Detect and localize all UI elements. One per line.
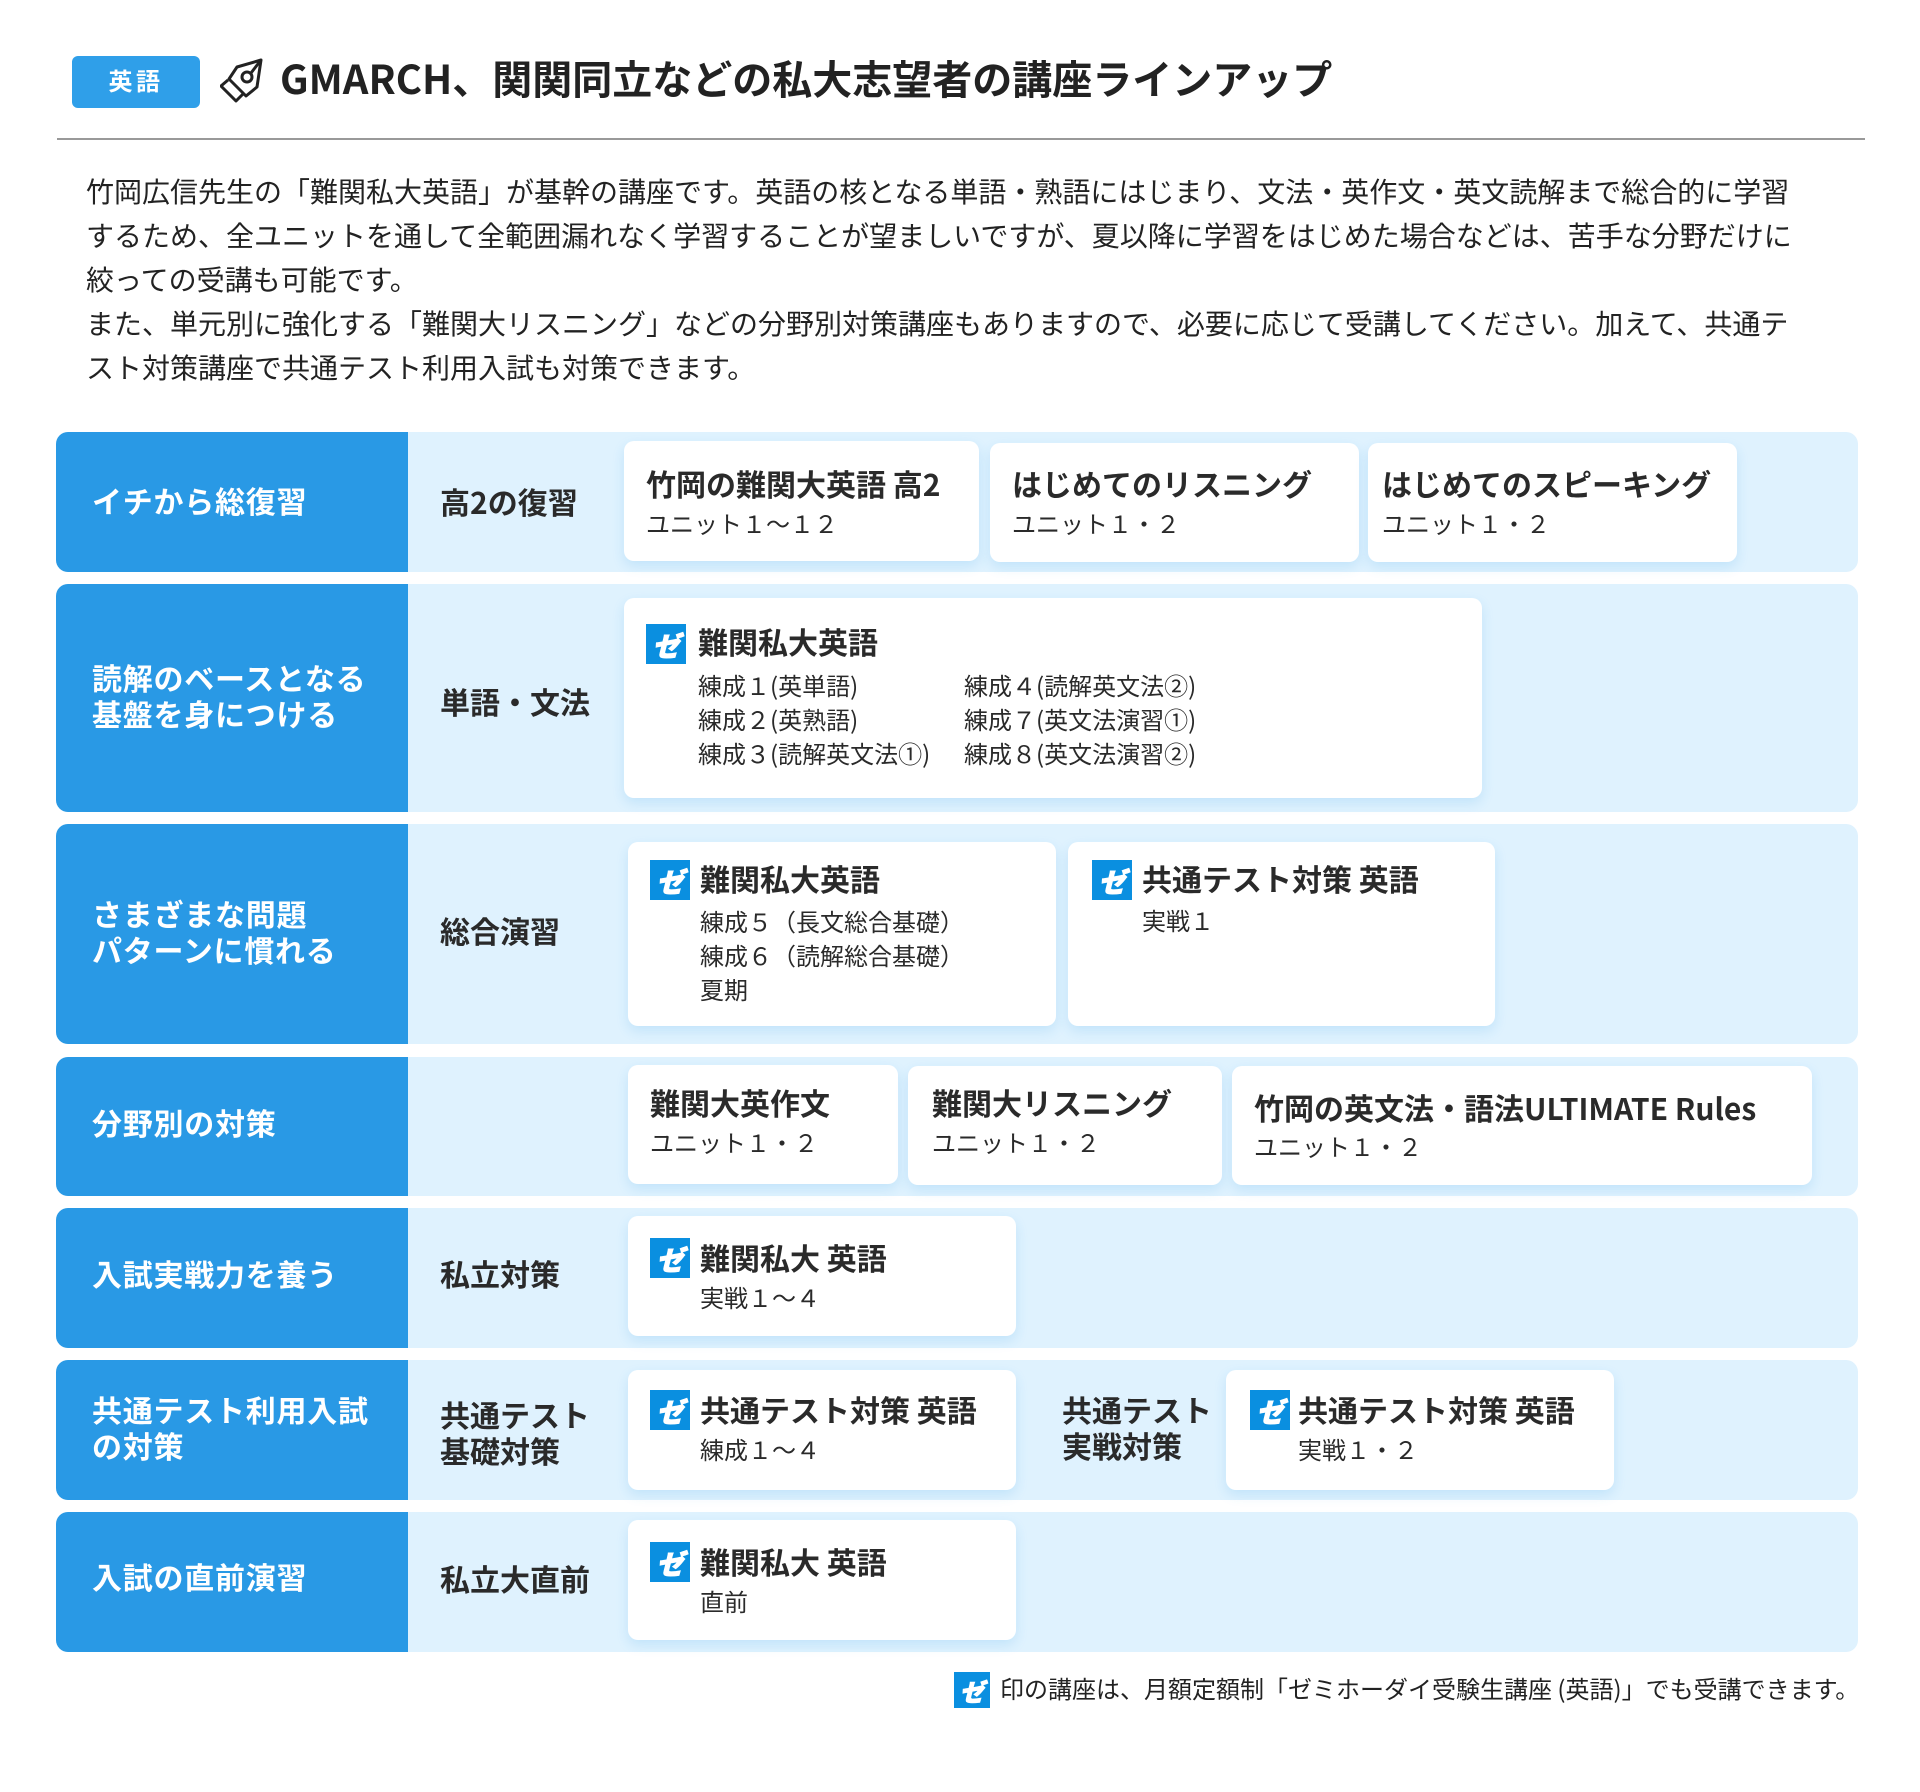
row 3 panel [56, 824, 1858, 1044]
card units: 実戦１ [1142, 902, 1214, 937]
row 2 heading [56, 584, 408, 812]
unit list right: 練成８(英文法演習②) [964, 735, 1196, 770]
card title: はじめてのスピーキング [1382, 461, 1711, 505]
row 5 heading [56, 1208, 408, 1348]
intro paragraph: また、単元別に強化する「難関大リスニング」などの分野別対策講座もありますので、必要に応じて受講してください。加えて、共通テ [86, 303, 1788, 343]
card: はじめてのリスニング [990, 443, 1359, 562]
row 5 panel [56, 1208, 1858, 1348]
card title: 難関大リスニング [932, 1080, 1172, 1124]
row 2 label: 基盤を身につける [92, 691, 338, 735]
card: 難関大リスニング [908, 1066, 1222, 1185]
intro paragraph: 絞っての受講も可能です。 [86, 259, 418, 299]
intro paragraph: 竹岡広信先生の「難関私大英語」が基幹の講座です。英語の核となる単語・熟語にはじまり、文法・英作文・英文読解まで総合的に学習 [86, 171, 1789, 211]
row 2 label [92, 655, 366, 735]
row 5 sub label: 私立対策 [440, 1251, 560, 1295]
row 6 heading [56, 1360, 408, 1500]
card title: はじめてのリスニング [1012, 461, 1312, 505]
row 7 panel [56, 1512, 1858, 1652]
row 2 panel [56, 584, 1858, 812]
unit list left: 練成２(英熟語) [698, 701, 858, 736]
unit list right: 練成７(英文法演習①) [964, 701, 1196, 736]
intro paragraph [86, 171, 1792, 387]
unit list right [964, 667, 1196, 770]
unit list: 夏期 [700, 971, 748, 1006]
card units: ユニット１・２ [932, 1124, 1100, 1159]
card title: 難関私大 英語 [700, 1539, 887, 1583]
row 6 second sub label: 共通テスト [1062, 1387, 1212, 1431]
row 2 sub label: 単語・文法 [440, 679, 590, 723]
row 6 panel [56, 1360, 1858, 1500]
unit list [700, 903, 964, 1006]
card title: 難関私大 英語 [700, 1235, 887, 1279]
card title: 竹岡の英文法・語法ULTIMATE Rules [1254, 1085, 1756, 1129]
unit list left: 練成３(読解英文法①) [698, 735, 930, 770]
unit list: 練成６（読解総合基礎） [700, 937, 964, 972]
row 6 second sub label: 実戦対策 [1062, 1423, 1182, 1467]
row 1 label: イチから総復習 [92, 478, 307, 522]
card units: ユニット１・２ [1382, 505, 1550, 540]
row 6 sub label: 基礎対策 [440, 1428, 560, 1472]
row 6 label [92, 1387, 369, 1467]
card: 共通テスト対策 英語 [1068, 842, 1495, 1026]
row 7 label: 入試の直前演習 [92, 1554, 307, 1598]
row 4 label: 分野別の対策 [92, 1100, 276, 1144]
row 3 label: さまざまな問題 [92, 891, 307, 935]
row 6 sub label: 共通テスト [440, 1392, 590, 1436]
row 3 label [92, 891, 336, 971]
intro paragraph: するため、全ユニットを通して全範囲漏れなく学習することが望ましいですが、夏以降に学習をはじめた場合などは、苦手な分野だけに [86, 215, 1792, 255]
card: 難関私大 英語 直前 [628, 1520, 1016, 1640]
unit list left [698, 667, 930, 770]
row 1 panel: イチから総復習 [56, 432, 1858, 572]
row 3 label: パターンに慣れる [92, 927, 336, 971]
card title: 難関私大英語 [700, 856, 880, 900]
title: GMARCH、関関同立などの私大志望者の講座ラインアップ [280, 48, 1332, 106]
card: 難関大英作文 [628, 1065, 898, 1184]
row 6 label: 共通テスト利用入試 [92, 1387, 369, 1431]
card units: ユニット１・２ [1254, 1128, 1422, 1163]
row 4 panel [56, 1057, 1858, 1196]
row 5 label: 入試実戦力を養う [92, 1251, 338, 1295]
card units: 練成１〜４ [700, 1431, 820, 1466]
card: はじめてのスピーキング [1368, 443, 1737, 562]
card title: 共通テスト対策 英語 [1142, 856, 1419, 900]
card title: 竹岡の難関大英語 高2 [646, 461, 941, 505]
row 7 sub label: 私立大直前 [440, 1556, 590, 1600]
row 3 sub label: 総合演習 [440, 908, 560, 952]
row 6 second sub label [1062, 1387, 1212, 1467]
card: 難関私大 英語 [628, 1216, 1016, 1336]
icon: pen nib [220, 58, 262, 103]
row 2 label: 読解のベースとなる [92, 655, 366, 699]
card units: 直前 [700, 1583, 748, 1618]
unit list: 練成５（長文総合基礎） [700, 903, 964, 938]
unit list left: 練成１(英単語) [698, 667, 858, 702]
row 1 sub label: 高2の復習 [440, 479, 578, 523]
card units: 実戦１〜４ [700, 1279, 820, 1314]
row 4 heading [56, 1057, 408, 1196]
header: subject tag: 英語 [108, 62, 164, 97]
row 3 heading [56, 824, 408, 1044]
card title: 共通テスト対策 英語 [700, 1387, 977, 1431]
card: 竹岡の難関大英語 高2 [624, 441, 979, 561]
card: 難関私大英語 [628, 842, 1056, 1026]
footnote: 印の講座は、月額定額制「ゼミホーダイ受験生講座 (英語)」でも受講できます。 [1000, 1670, 1859, 1705]
card: 共通テスト対策 英語 [628, 1370, 1016, 1490]
card units: 実戦１・２ [1298, 1431, 1418, 1466]
row 6 label: の対策 [92, 1423, 184, 1467]
card title: 難関私大英語 [698, 619, 878, 663]
card title: 共通テスト対策 英語 [1298, 1387, 1575, 1431]
card: 難関私大英語 [624, 598, 1482, 798]
unit list right: 練成４(読解英文法②) [964, 667, 1196, 702]
card: 共通テスト対策 英語 実戦 [1226, 1370, 1614, 1490]
card units: ユニット１〜１２ [646, 505, 838, 540]
card units: ユニット１・２ [650, 1124, 818, 1159]
card: 竹岡の英文法・語法ULTIMATE Rules [1232, 1066, 1812, 1185]
row 1 heading [56, 432, 408, 572]
row 7 heading [56, 1512, 408, 1652]
header: subject tag [72, 56, 200, 108]
card units: ユニット１・２ [1012, 505, 1180, 540]
row 6 sub label [440, 1392, 590, 1472]
intro paragraph: スト対策講座で共通テスト利用入試も対策できます。 [86, 347, 755, 387]
card title: 難関大英作文 [650, 1080, 830, 1124]
